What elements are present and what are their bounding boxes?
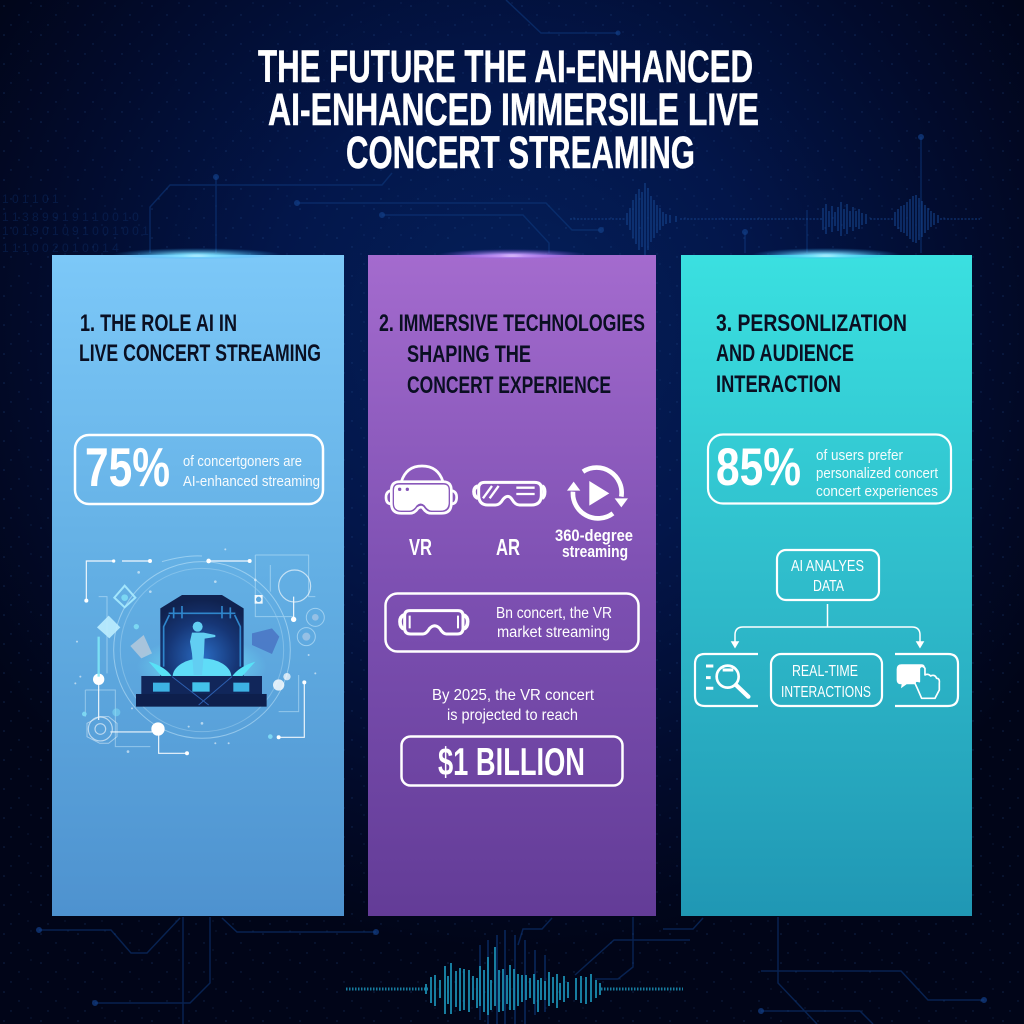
faint binary digits: 1 0 1 9 0 1 0 9 1 0 0 1 0 0 1	[2, 224, 149, 238]
stat: 75 percent: 75%	[85, 436, 170, 498]
heading: role of AI	[79, 310, 321, 367]
panel: role of AI	[52, 248, 344, 916]
box: AI analyses data: DATA	[813, 578, 844, 595]
title	[258, 41, 759, 178]
heading: immersive technologies: 2. IMMERSIVE TECHNOLOGIES	[379, 310, 645, 337]
icon box: touch interaction	[895, 654, 958, 706]
callout: VR market: market streaming	[497, 624, 610, 641]
stat: 75 percent	[75, 435, 323, 504]
stat: 85 percent: concert experiences	[816, 484, 938, 500]
icon: VR headset	[386, 466, 457, 513]
callout: VR market: Bn concert, the VR	[496, 605, 612, 622]
label: 360-degree streaming: 360-degree	[555, 527, 633, 545]
heading: personalization: 3. PERSONLIZATION	[716, 310, 907, 337]
title: CONCERT STREAMING	[346, 127, 695, 178]
stat: 85 percent	[708, 434, 951, 504]
heading: personalization: INTERACTION	[716, 371, 841, 398]
heading: immersive technologies: CONCERT EXPERIENCE	[407, 372, 611, 399]
panel: immersive technologies	[368, 249, 656, 916]
box: real-time interactions: INTERACTIONS	[781, 684, 871, 701]
callout: 1 billion	[402, 736, 622, 786]
heading: immersive technologies	[379, 310, 645, 399]
box: real-time interactions: REAL-TIME	[792, 663, 858, 680]
bottom waveform	[346, 930, 683, 1024]
arrows: data flow	[732, 604, 923, 647]
title: AI-ENHANCED IMMERSILE LIVE	[268, 84, 759, 135]
label: AR: AR	[496, 534, 520, 560]
top waveform	[570, 183, 980, 255]
figure	[190, 622, 215, 675]
heading: personalization	[716, 310, 907, 398]
panel: personalization	[681, 248, 972, 916]
heading: role of AI: LIVE CONCERT STREAMING	[79, 340, 321, 367]
box: AI analyses data: AI ANALYES	[791, 558, 864, 575]
title: THE FUTURE THE AI-ENHANCED	[258, 41, 753, 92]
text: VR market projection: By 2025, the VR concert	[432, 687, 595, 704]
label: 360-degree streaming	[555, 527, 633, 561]
label: VR: VR	[409, 534, 432, 560]
illustration: holographic concert stage	[74, 548, 324, 755]
icon: 360-degree streaming	[567, 468, 628, 518]
heading: personalization: AND AUDIENCE	[716, 340, 854, 367]
faint binary digits: 1 1 3 8 9 9 1 9 1 1 0 0 1 0	[2, 210, 139, 224]
callout: VR market	[386, 594, 638, 652]
text: VR market projection: is projected to reach	[447, 707, 578, 724]
stat: 85 percent: 85%	[716, 438, 801, 497]
icon box: data analysis	[695, 654, 758, 706]
faint binary digits: 1 0 1 1 0 1	[2, 192, 59, 206]
stat: 75 percent: of concertgoners are	[183, 454, 302, 470]
callout: 1 billion: $1 BILLION	[438, 741, 585, 784]
stat: 85 percent: of users prefer	[816, 448, 903, 464]
faint binary digits: 1 1 1 0 0 2 0 1 0 0 1 4	[2, 241, 119, 255]
icon: AR glasses	[474, 482, 545, 505]
box: AI analyses data	[777, 550, 879, 600]
box: real-time interactions	[771, 654, 882, 706]
faint binary digits	[2, 192, 149, 255]
label: 360-degree streaming: streaming	[562, 543, 628, 561]
heading: role of AI: 1. THE ROLE AI IN	[80, 310, 237, 337]
text: VR market projection	[432, 687, 595, 724]
stat: 85 percent: personalized concert	[816, 466, 938, 482]
heading: immersive technologies: SHAPING THE	[407, 341, 531, 368]
stat: 75 percent: AI-enhanced streaming	[183, 474, 320, 490]
